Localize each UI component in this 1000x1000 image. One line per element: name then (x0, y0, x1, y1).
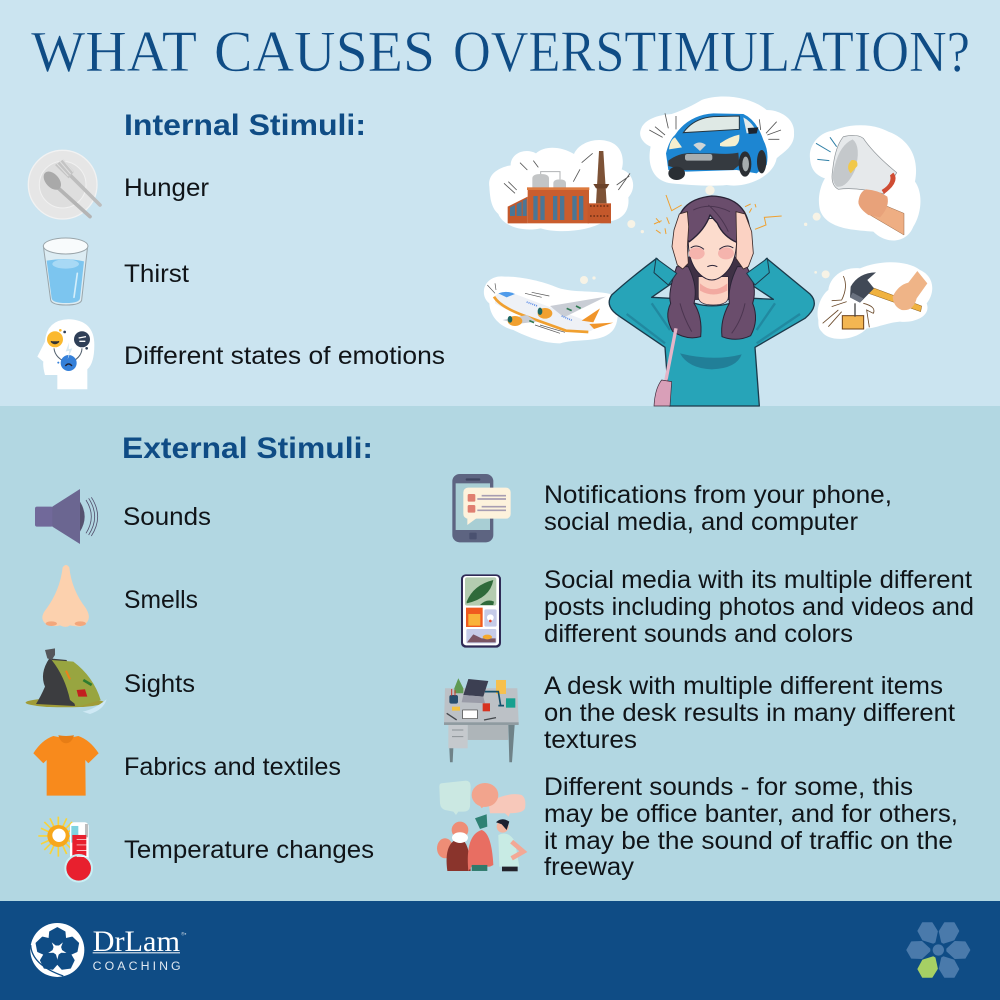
logo wordmark (93, 925, 187, 973)
text: notifications: Notifications from your phone, (544, 481, 892, 509)
thought dots (580, 186, 830, 284)
logo wordmark: DrLam (93, 925, 180, 958)
text: social media: Social media with its multiple different (544, 566, 972, 594)
text: desk (544, 672, 955, 754)
title: WHAT (31, 19, 197, 84)
thought bubble: factory (489, 140, 633, 231)
text: hunger: Hunger (124, 174, 209, 202)
text: different sounds: it may be the sound of traffic on the (544, 827, 953, 855)
icon: speaker (35, 489, 98, 544)
text: sights: Sights (124, 670, 195, 698)
text: social media: different sounds and colors (544, 620, 853, 648)
thought bubble: car (640, 97, 794, 186)
icon: cluttered desk (444, 678, 519, 762)
icon: garbage pile (26, 648, 107, 714)
icon: people talking (437, 781, 525, 871)
text: notifications (544, 481, 892, 536)
text: temperature: Temperature changes (124, 836, 374, 864)
logo wordmark: COACHING (93, 959, 181, 973)
flower emblem (907, 919, 970, 981)
icon: orange t-shirt (33, 735, 99, 796)
text: notifications: social media, and computer (544, 508, 858, 536)
text: different sounds: may be office banter, and for others, (544, 800, 958, 828)
text: different sounds (544, 773, 958, 881)
text: different sounds: Different sounds - for some, this (544, 773, 913, 801)
heading: external stimuli: External Stimuli: (122, 432, 373, 465)
thought bubble: hammer (818, 262, 932, 339)
text: different sounds: freeway (544, 853, 635, 881)
text: thirst: Thirst (124, 260, 189, 288)
title (31, 19, 970, 84)
text: smells: Smells (124, 586, 198, 614)
text: fabrics: Fabrics and textiles (124, 753, 341, 781)
panel: internal stimuli background (0, 0, 1000, 406)
stress lightning marks (654, 195, 782, 234)
logo emblem (30, 923, 84, 977)
panel: external stimuli background (0, 406, 1000, 901)
text: desk: A desk with multiple different items (544, 672, 943, 700)
logo wordmark: ®• (181, 930, 187, 937)
list: external stimuli, right column (437, 474, 974, 881)
thought bubble: airplane (484, 276, 618, 343)
title: CAUSES (214, 19, 435, 84)
illustration: overwhelmed girl with noise thought bubbles (484, 97, 932, 406)
icon: sun and thermometer (38, 817, 92, 882)
text: desk: on the desk results in many different (544, 699, 955, 727)
icon: social media phone (461, 574, 501, 648)
text: emotions: Different states of emotions (124, 342, 445, 370)
icon: phone with notification (452, 474, 511, 542)
text: sounds: Sounds (123, 503, 211, 531)
list: external stimuli, left column (26, 489, 374, 882)
icon: plate with fork and spoon (28, 150, 100, 219)
heading: internal stimuli: Internal Stimuli: (124, 109, 366, 142)
text: social media: posts including photos and videos and (544, 593, 974, 621)
girl (609, 196, 814, 406)
list: internal stimuli (28, 150, 445, 389)
logo: DrLam Coaching (30, 923, 187, 977)
icon: head with emotions (37, 319, 94, 389)
icon: nose (42, 565, 89, 627)
text: desk: textures (544, 726, 637, 754)
thought bubble: megaphone (810, 125, 920, 241)
icon: glass of water (43, 238, 88, 305)
text: social media (544, 566, 974, 648)
footer band (0, 901, 1000, 1000)
